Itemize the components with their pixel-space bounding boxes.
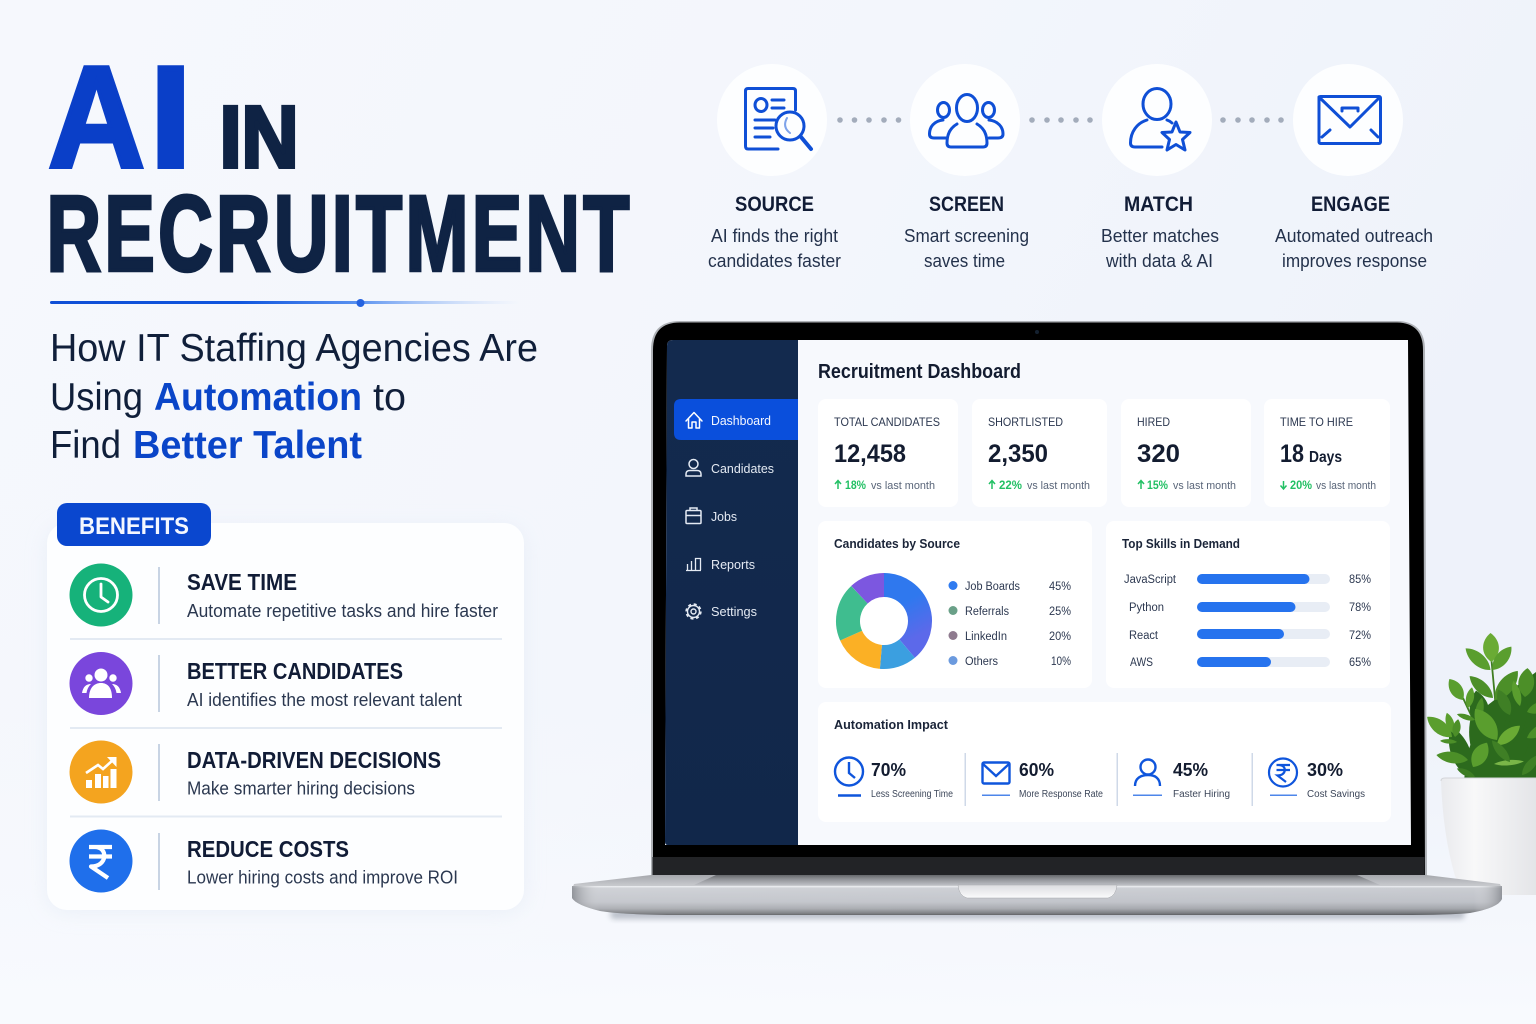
title: A xyxy=(48,36,145,198)
benefit: reduce costs xyxy=(70,830,458,892)
subtitle: Find xyxy=(50,424,121,467)
bar chart: AWS xyxy=(1130,657,1153,669)
kpi: time to hire: 18 xyxy=(1280,440,1304,468)
laptop base xyxy=(572,875,1502,915)
step: engage: ENGAGE xyxy=(1311,192,1390,216)
plant xyxy=(1423,633,1536,895)
benefit: data-driven decisions: DATA-DRIVEN DECISIONS xyxy=(187,747,441,773)
icon: clock xyxy=(84,578,118,612)
panel: top skills xyxy=(1106,521,1390,688)
laptop notch xyxy=(958,885,1117,898)
icon: briefcase xyxy=(686,508,701,524)
kpi: hired: 15% xyxy=(1147,478,1168,492)
subtitle: Better Talent xyxy=(133,424,362,467)
impact: response rate xyxy=(982,760,1103,800)
icon: gear xyxy=(686,604,701,619)
icon: envelope xyxy=(982,762,1010,784)
kpi: time to hire xyxy=(1264,399,1390,507)
icon: user xyxy=(686,460,701,476)
benefits badge xyxy=(57,503,211,546)
kpi: time to hire: Days xyxy=(1309,449,1342,466)
bar chart: React xyxy=(1129,630,1159,642)
kpi: shortlisted xyxy=(972,399,1107,507)
bar chart: 78% xyxy=(1349,602,1371,614)
plant foliage light xyxy=(1423,633,1536,780)
benefit: reduce costs: Lower hiring costs and improve ROI xyxy=(187,868,458,888)
impact: screening time xyxy=(835,758,953,800)
step connector dots xyxy=(837,117,1284,123)
donut legend: 20% xyxy=(1049,631,1071,643)
icon: envelope xyxy=(1319,96,1380,144)
subtitle: Automation xyxy=(154,376,362,419)
step: match: Better matches xyxy=(1101,226,1219,246)
donut legend xyxy=(948,581,1071,668)
benefit: better candidates: BETTER CANDIDATES xyxy=(187,658,403,684)
panel: candidates by source xyxy=(818,521,1092,688)
bar chart xyxy=(1124,574,1371,669)
kpi: total candidates: 12,458 xyxy=(834,440,906,468)
donut chart xyxy=(848,585,920,657)
icon: rupee xyxy=(89,847,112,878)
laptop lid xyxy=(651,321,1427,876)
kpi: shortlisted: 22% xyxy=(999,478,1022,492)
icon: bars xyxy=(686,558,701,570)
icon: person xyxy=(1135,760,1160,786)
laptop xyxy=(572,321,1502,919)
kpi: shortlisted: SHORTLISTED xyxy=(988,415,1063,429)
panel: top skills: Top Skills in Demand xyxy=(1122,536,1240,551)
kpi: time to hire: vs last month xyxy=(1316,480,1376,492)
subtitle xyxy=(50,327,538,467)
step: source: AI finds the right xyxy=(711,226,838,246)
title: RECRUITMENT xyxy=(46,173,633,294)
step: screen: SCREEN xyxy=(929,192,1004,216)
impact: screening time: Less Screening Time xyxy=(871,789,953,800)
impact: cost savings: 30% xyxy=(1307,760,1343,780)
kpi: total candidates: vs last month xyxy=(871,480,935,492)
bar chart: JavaScript xyxy=(1124,574,1177,586)
donut legend: Job Boards xyxy=(965,581,1020,593)
step: match: MATCH xyxy=(1124,192,1193,216)
icon: resume search xyxy=(746,88,811,149)
kpi: shortlisted: vs last month xyxy=(1027,480,1090,492)
benefit: data-driven decisions: Make smarter hiring decisions xyxy=(187,778,415,798)
impact: cost savings xyxy=(1269,758,1365,800)
donut legend: 10% xyxy=(1051,656,1071,668)
nav: candidates: Candidates xyxy=(711,461,774,476)
donut legend: Referrals xyxy=(965,606,1009,618)
dashboard heading: Recruitment Dashboard xyxy=(818,361,1021,383)
benefit: save time xyxy=(70,564,498,626)
step: engage xyxy=(1275,64,1433,271)
step: match xyxy=(1101,64,1219,271)
donut legend: 25% xyxy=(1049,606,1071,618)
benefit: reduce costs: REDUCE COSTS xyxy=(187,836,349,862)
plant pot xyxy=(1441,778,1536,895)
benefit: save time: SAVE TIME xyxy=(187,569,297,595)
step: source: SOURCE xyxy=(735,192,814,216)
title: IN xyxy=(220,89,299,186)
panel: benefits xyxy=(47,503,524,912)
bar chart: 72% xyxy=(1349,630,1371,642)
nav: jobs: Jobs xyxy=(711,509,737,524)
plant foliage dark xyxy=(1442,672,1536,783)
nav active: dashboard: Dashboard xyxy=(711,413,771,428)
kpi: shortlisted: 2,350 xyxy=(988,440,1048,468)
bar chart: 65% xyxy=(1349,657,1371,669)
subtitle: to xyxy=(373,376,406,419)
impact: screening time: 70% xyxy=(871,760,906,780)
kpi: time to hire: 20% xyxy=(1290,478,1312,492)
kpi: total candidates: 18% xyxy=(845,478,866,492)
kpi: hired: 320 xyxy=(1137,440,1180,468)
step: engage: Automated outreach xyxy=(1275,226,1433,246)
kpi: time to hire: TIME TO HIRE xyxy=(1280,415,1353,429)
impact: faster hiring xyxy=(1133,760,1230,800)
nav: reports xyxy=(686,557,755,572)
icon: group of people xyxy=(930,94,1003,147)
process steps xyxy=(708,64,1433,271)
step: engage: improves response xyxy=(1282,251,1427,271)
icon: clock xyxy=(835,758,863,796)
panel: automation impact xyxy=(818,702,1391,822)
screen xyxy=(665,340,1411,845)
benefits badge: BENEFITS xyxy=(79,513,189,540)
benefit: save time: Automate repetitive tasks and hire faster xyxy=(187,601,498,621)
icon: people xyxy=(82,668,121,698)
nav: candidates xyxy=(686,460,774,476)
step: source: candidates faster xyxy=(708,251,841,271)
panel: automation impact: Automation Impact xyxy=(834,717,949,732)
nav: jobs xyxy=(686,508,737,524)
benefit: better candidates: AI identifies the most relevant talent xyxy=(187,690,462,710)
bar chart: 85% xyxy=(1349,574,1371,586)
donut legend: Others xyxy=(965,656,998,668)
step: screen xyxy=(904,64,1029,271)
step: match: with data & AI xyxy=(1105,251,1213,271)
nav: reports: Reports xyxy=(711,557,755,572)
impact: faster hiring: Faster Hiring xyxy=(1173,789,1230,800)
kpi: total candidates xyxy=(818,399,958,507)
sidebar xyxy=(665,340,798,845)
title xyxy=(46,36,633,294)
subtitle: Using xyxy=(50,376,143,419)
impact: faster hiring: 45% xyxy=(1173,760,1208,780)
icon: person with star xyxy=(1130,88,1190,150)
step: screen: saves time xyxy=(924,251,1005,271)
donut legend: 45% xyxy=(1049,581,1071,593)
icon: home xyxy=(686,412,702,428)
step: source xyxy=(708,64,841,271)
kpi: total candidates: TOTAL CANDIDATES xyxy=(834,415,940,429)
panel: candidates by source: Candidates by Source xyxy=(834,536,960,551)
step: screen: Smart screening xyxy=(904,226,1029,246)
benefit: data-driven decisions xyxy=(70,740,441,804)
plant stems xyxy=(1450,655,1498,780)
impact: response rate: 60% xyxy=(1019,760,1054,780)
benefit: better candidates xyxy=(70,652,462,715)
nav: settings: Settings xyxy=(711,604,757,619)
title: I xyxy=(151,38,190,197)
nav active: dashboard xyxy=(674,399,798,440)
icon: rupee coin xyxy=(1269,758,1297,786)
kpi: hired xyxy=(1121,399,1251,507)
subtitle: How IT Staffing Agencies Are xyxy=(50,327,538,370)
nav: settings xyxy=(686,604,757,619)
donut legend: LinkedIn xyxy=(965,631,1007,643)
kpi: hired: HIRED xyxy=(1137,415,1170,429)
laptop shadow xyxy=(610,910,1465,919)
bar chart: Python xyxy=(1129,602,1164,614)
title divider xyxy=(50,299,520,307)
impact: cost savings: Cost Savings xyxy=(1307,789,1365,800)
impact: response rate: More Response Rate xyxy=(1019,789,1103,800)
icon: growth chart xyxy=(86,757,116,788)
kpi: hired: vs last month xyxy=(1173,480,1236,492)
